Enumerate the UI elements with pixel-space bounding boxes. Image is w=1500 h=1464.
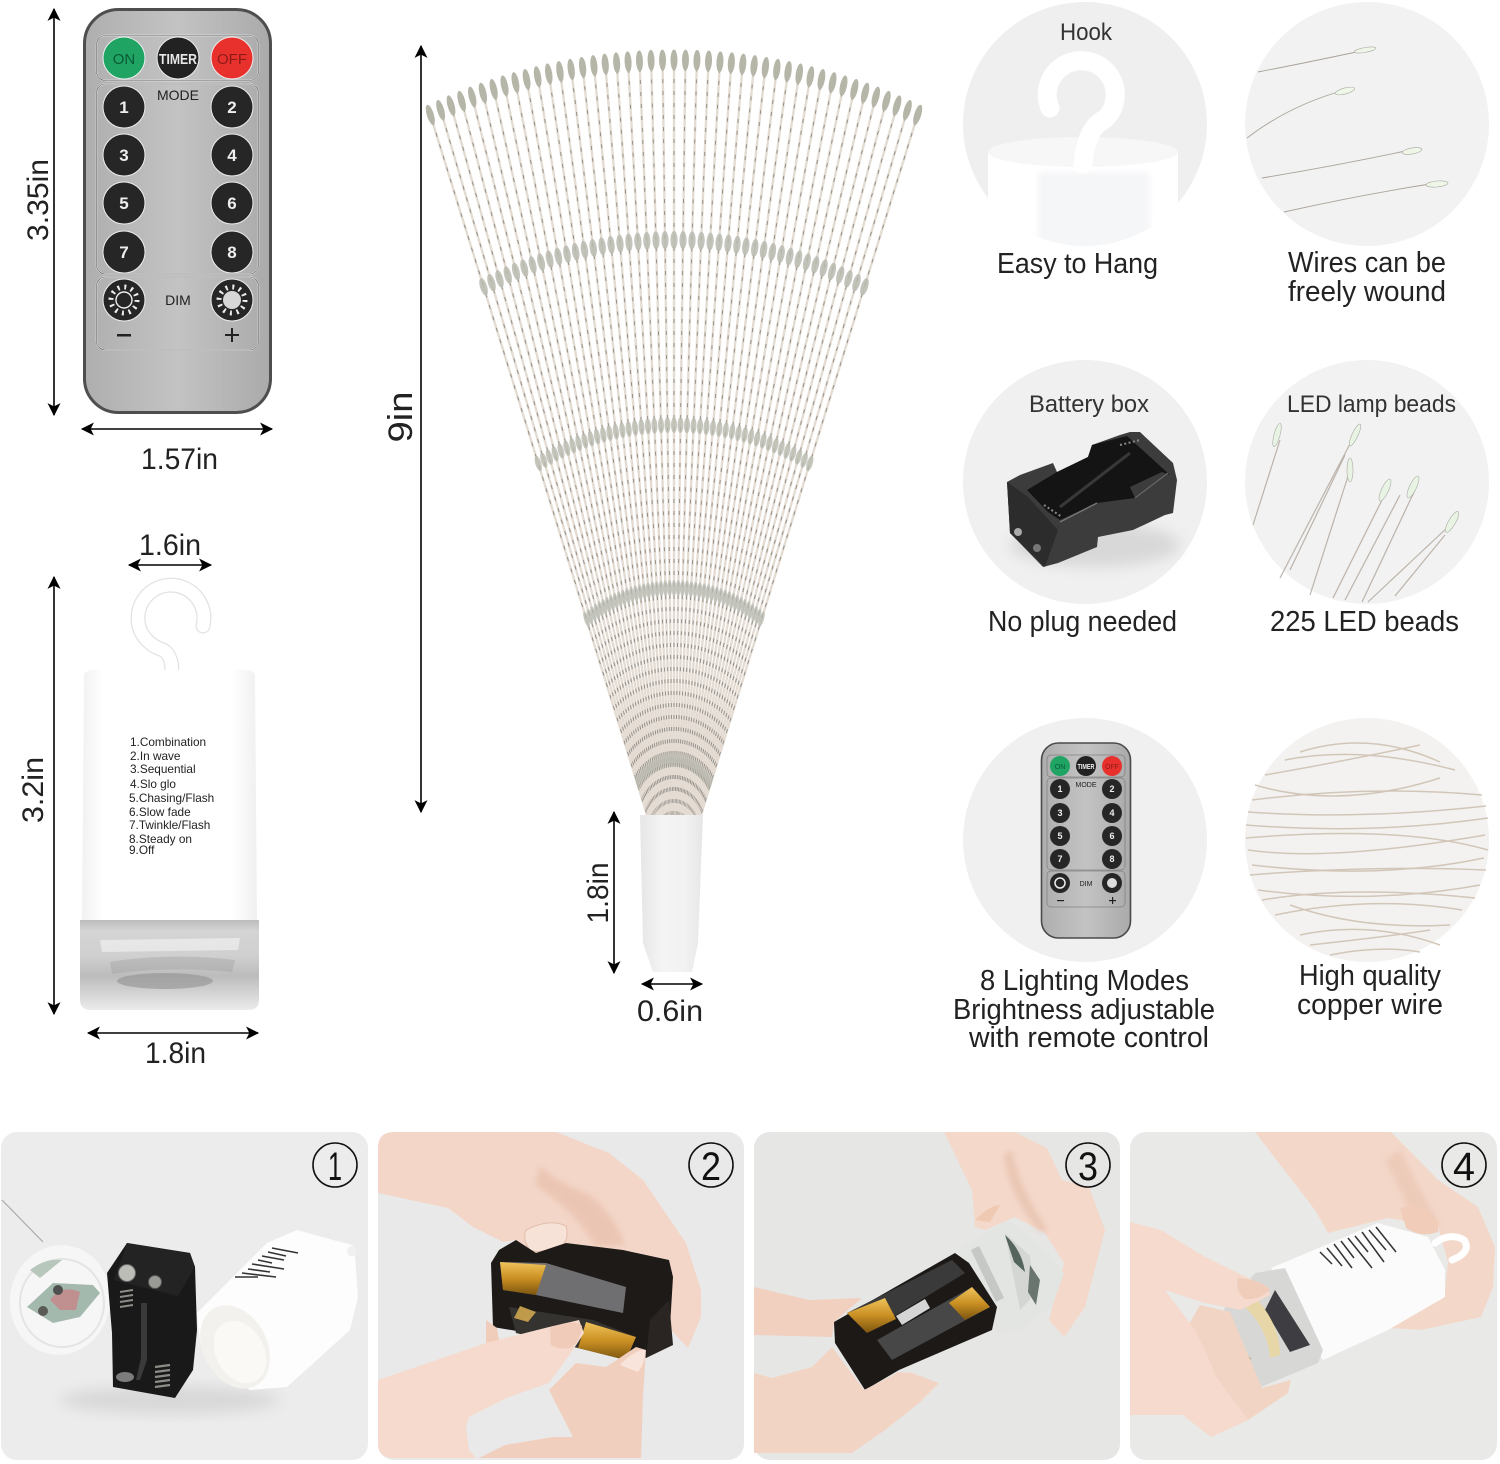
arrow: cylinder height xyxy=(53,577,55,1014)
text: LED lamp beads: LED lamp beads xyxy=(1287,391,1456,418)
circle: small remote: DIM xyxy=(1080,881,1093,888)
text: 8 lighting modes: 8 Lighting Modes xyxy=(980,965,1189,997)
remote control: ON xyxy=(113,51,135,68)
remote control: TIMER xyxy=(159,51,197,68)
step number 4 xyxy=(1442,1143,1486,1189)
mode list: 6.Slow fade xyxy=(129,805,191,819)
text: No plug needed: No plug needed xyxy=(988,606,1177,638)
circle: small remote: 4 xyxy=(1109,808,1115,818)
label: 1.8in: 1.8in xyxy=(145,1037,206,1070)
text: High quality copper wire: High quality xyxy=(1299,960,1441,992)
label: 0.6in: 0.6in xyxy=(637,995,703,1028)
panel: step 3 xyxy=(754,1132,1120,1460)
battery cylinder xyxy=(80,585,259,1010)
mode list: 3.Sequential xyxy=(130,762,196,776)
mode list: 4.Slo glo xyxy=(130,777,176,791)
circle: hook xyxy=(963,2,1207,252)
step number 3 xyxy=(1066,1143,1110,1189)
top hand xyxy=(944,1132,1105,1337)
mode list xyxy=(129,735,214,857)
circle: small remote: ON xyxy=(1055,764,1065,771)
panel: step 1 xyxy=(1,1132,368,1460)
remote control: 2 xyxy=(227,98,237,117)
remote control xyxy=(84,10,270,412)
label: 3.2in: 3.2in xyxy=(17,757,50,823)
left hands xyxy=(754,1287,862,1337)
mode list: 9.Off xyxy=(129,843,155,857)
firework fan of LED wires xyxy=(424,50,924,837)
remote control: 5 xyxy=(119,194,129,213)
step number 2 xyxy=(689,1143,733,1189)
circle: battery box xyxy=(963,360,1207,604)
text: Wires can be freely wound: Wires can be xyxy=(1288,247,1446,279)
mode list: 8.Steady on xyxy=(129,832,192,846)
step number 4: 4 xyxy=(1453,1145,1475,1189)
text: 8 lighting modes: Brightness adjustable xyxy=(953,994,1215,1026)
mode list: 1.Combination xyxy=(130,735,206,749)
text: Wires can be freely wound xyxy=(1288,247,1446,308)
panel: step 2 xyxy=(378,1132,744,1460)
remote control: 7 xyxy=(119,243,129,262)
battery holder xyxy=(834,1253,997,1390)
arrow: hook width xyxy=(129,564,211,566)
label: 3.35in: 3.35in xyxy=(22,159,55,241)
mode list: 5.Chasing/Flash xyxy=(129,791,214,805)
label: 1.8in tube: 1.8in xyxy=(582,862,615,924)
arrow: remote height xyxy=(53,9,55,415)
top hand xyxy=(1255,1132,1495,1330)
remote control: 1 xyxy=(119,98,129,117)
circle: small remote: OFF xyxy=(1105,764,1119,771)
text: Easy to Hang: Easy to Hang xyxy=(997,248,1158,280)
label: 1.6in: 1.6in xyxy=(139,529,201,562)
circle: small remote: 8 xyxy=(1109,854,1115,864)
upper hand xyxy=(378,1132,701,1348)
circle: small remote: TIMER xyxy=(1078,764,1094,771)
mode list: 2.In wave xyxy=(130,749,181,763)
step number 1: 1 xyxy=(328,1145,342,1189)
left hand xyxy=(1180,1305,1291,1437)
circle: small remote: 2 xyxy=(1109,784,1115,794)
step number 3: 3 xyxy=(1078,1145,1098,1189)
circle: copper wire xyxy=(1245,718,1489,962)
text: High quality copper wire: copper wire xyxy=(1297,989,1443,1021)
remote control: 6 xyxy=(227,194,237,213)
text: Wires can be freely wound: freely wound xyxy=(1288,276,1446,308)
lower hand xyxy=(486,1320,500,1345)
circle: wires xyxy=(1245,2,1489,246)
arrow: fan height xyxy=(420,46,422,812)
text: 8 lighting modes xyxy=(953,965,1215,1054)
arrow: remote width xyxy=(82,428,272,430)
panel: step 4 xyxy=(1130,1132,1497,1460)
circle: LED beads xyxy=(1245,360,1489,604)
label: 9in: 9in xyxy=(382,392,420,442)
label: 1.57in: 1.57in xyxy=(141,443,218,476)
text: High quality copper wire xyxy=(1297,960,1443,1021)
white tube base xyxy=(640,815,703,972)
mode list: 7.Twinkle/Flash xyxy=(129,818,210,832)
circle: small remote: 5 xyxy=(1057,831,1063,841)
circle: small remote: MODE xyxy=(1076,782,1097,789)
remote control: MODE xyxy=(157,87,199,103)
text: Hook: Hook xyxy=(1060,19,1113,46)
remote control: 4 xyxy=(227,146,237,165)
remote control: 3 xyxy=(119,146,129,165)
text: 225 LED beads: 225 LED beads xyxy=(1270,606,1459,638)
circle: small remote xyxy=(963,718,1207,962)
arrow: tube height xyxy=(613,812,615,973)
circle: small remote: 7 xyxy=(1057,854,1063,864)
circle: small remote: 1 xyxy=(1057,784,1063,794)
text: Battery box: Battery box xyxy=(1029,391,1149,418)
step number 1 xyxy=(313,1143,357,1189)
circle: small remote: 3 xyxy=(1057,808,1063,818)
circle: small remote: 6 xyxy=(1109,831,1115,841)
remote control: DIM xyxy=(165,292,191,308)
remote control: 8 xyxy=(227,243,237,262)
arrow: cylinder width xyxy=(88,1032,258,1034)
clear cap xyxy=(1218,1268,1323,1387)
arrow: tube width xyxy=(642,983,702,985)
remote control: OFF xyxy=(217,51,247,68)
text: 8 lighting modes: with remote control xyxy=(968,1022,1209,1054)
step number 2: 2 xyxy=(701,1145,721,1189)
